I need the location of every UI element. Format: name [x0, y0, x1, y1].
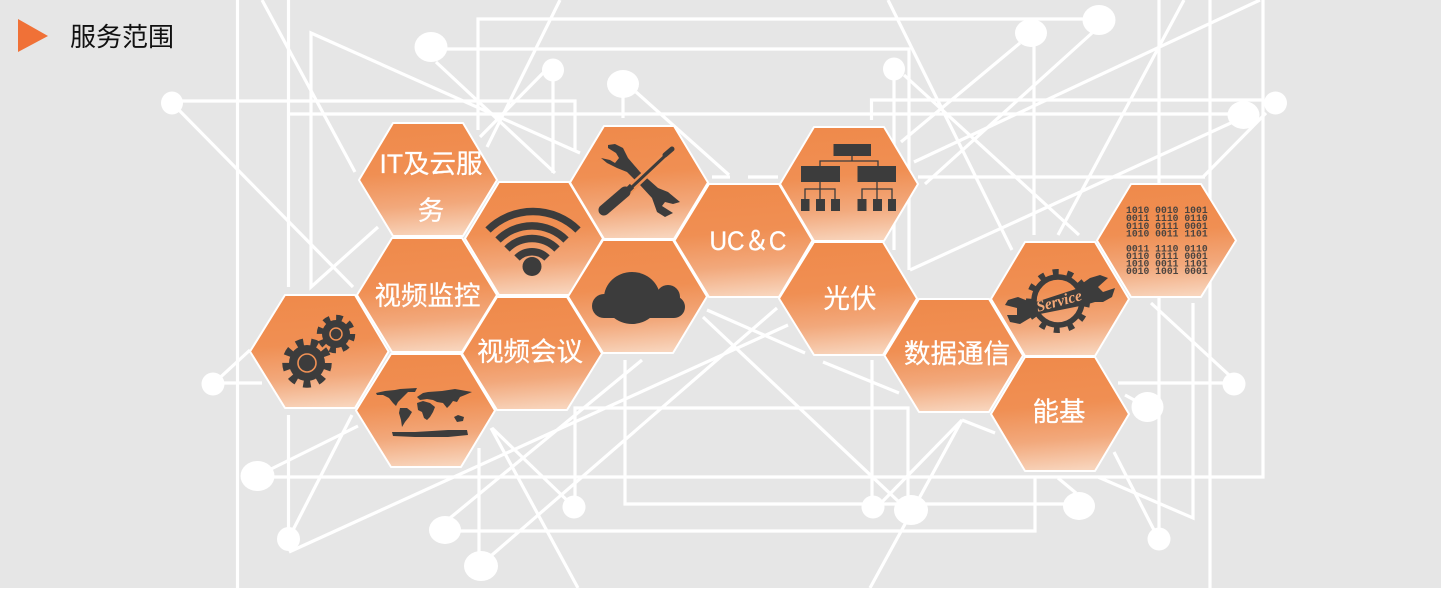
hexagon: service — [991, 242, 1129, 356]
hexagon: tools — [570, 126, 708, 239]
title: 服务范围 — [70, 22, 174, 52]
icon: binary code: 0011 1110 0110 — [1126, 213, 1208, 224]
hexagon: photovoltaic — [779, 242, 917, 355]
icon: world map — [376, 388, 472, 437]
hexagon: video conference — [462, 297, 602, 410]
hexagon: UC&C — [674, 184, 812, 297]
hexagon: world map — [356, 354, 495, 467]
connector network background — [161, 0, 1287, 588]
hexagon: video surveillance — [357, 238, 497, 352]
icon: binary code: 1010 0011 1101 — [1126, 258, 1208, 270]
hexagon: cloud — [568, 240, 707, 353]
label: IT及云服务: 务 — [418, 196, 444, 226]
hexagon: org chart — [780, 127, 918, 241]
hexagon: IT cloud services — [359, 123, 497, 236]
label: UC&C: UC＆C — [710, 226, 786, 256]
icon: binary code: 0010 1001 0001 — [1126, 266, 1208, 277]
hexagon: binary — [1097, 184, 1236, 297]
label: 视频会议: 视频会议 — [477, 337, 583, 367]
hexagon: energy base — [991, 357, 1129, 471]
icon: cloud — [592, 272, 685, 324]
icon: service wrench and gear: Service — [1034, 287, 1084, 316]
icon: binary code: 1010 0010 1001 — [1126, 205, 1208, 216]
icon: binary code: 1010 0011 1101 — [1126, 228, 1208, 240]
title arrow icon — [18, 19, 48, 52]
icon: wifi — [488, 212, 578, 276]
label: IT及云服务: IT及云服 — [379, 149, 483, 179]
icon: binary code: 0110 0111 0001 — [1126, 221, 1208, 232]
hexagon: wifi — [465, 182, 603, 295]
label: IT及云服务 — [379, 149, 483, 226]
icon: gears — [286, 318, 352, 384]
icon: binary code — [1126, 205, 1208, 277]
icon: binary code: 0110 0111 0001 — [1126, 251, 1208, 262]
label: 光伏: 光伏 — [824, 284, 876, 314]
label: 能基: 能基 — [1032, 397, 1086, 427]
hexagon: data communication — [884, 299, 1023, 412]
icon: org chart — [801, 144, 896, 211]
icon: binary code: 0011 1110 0110 — [1126, 244, 1208, 254]
label: 视频监控: 视频监控 — [374, 281, 480, 311]
icon: wrench and screwdriver — [601, 144, 680, 217]
label: 数据通信: 数据通信 — [904, 339, 1010, 369]
hexagon: gears — [250, 295, 388, 408]
